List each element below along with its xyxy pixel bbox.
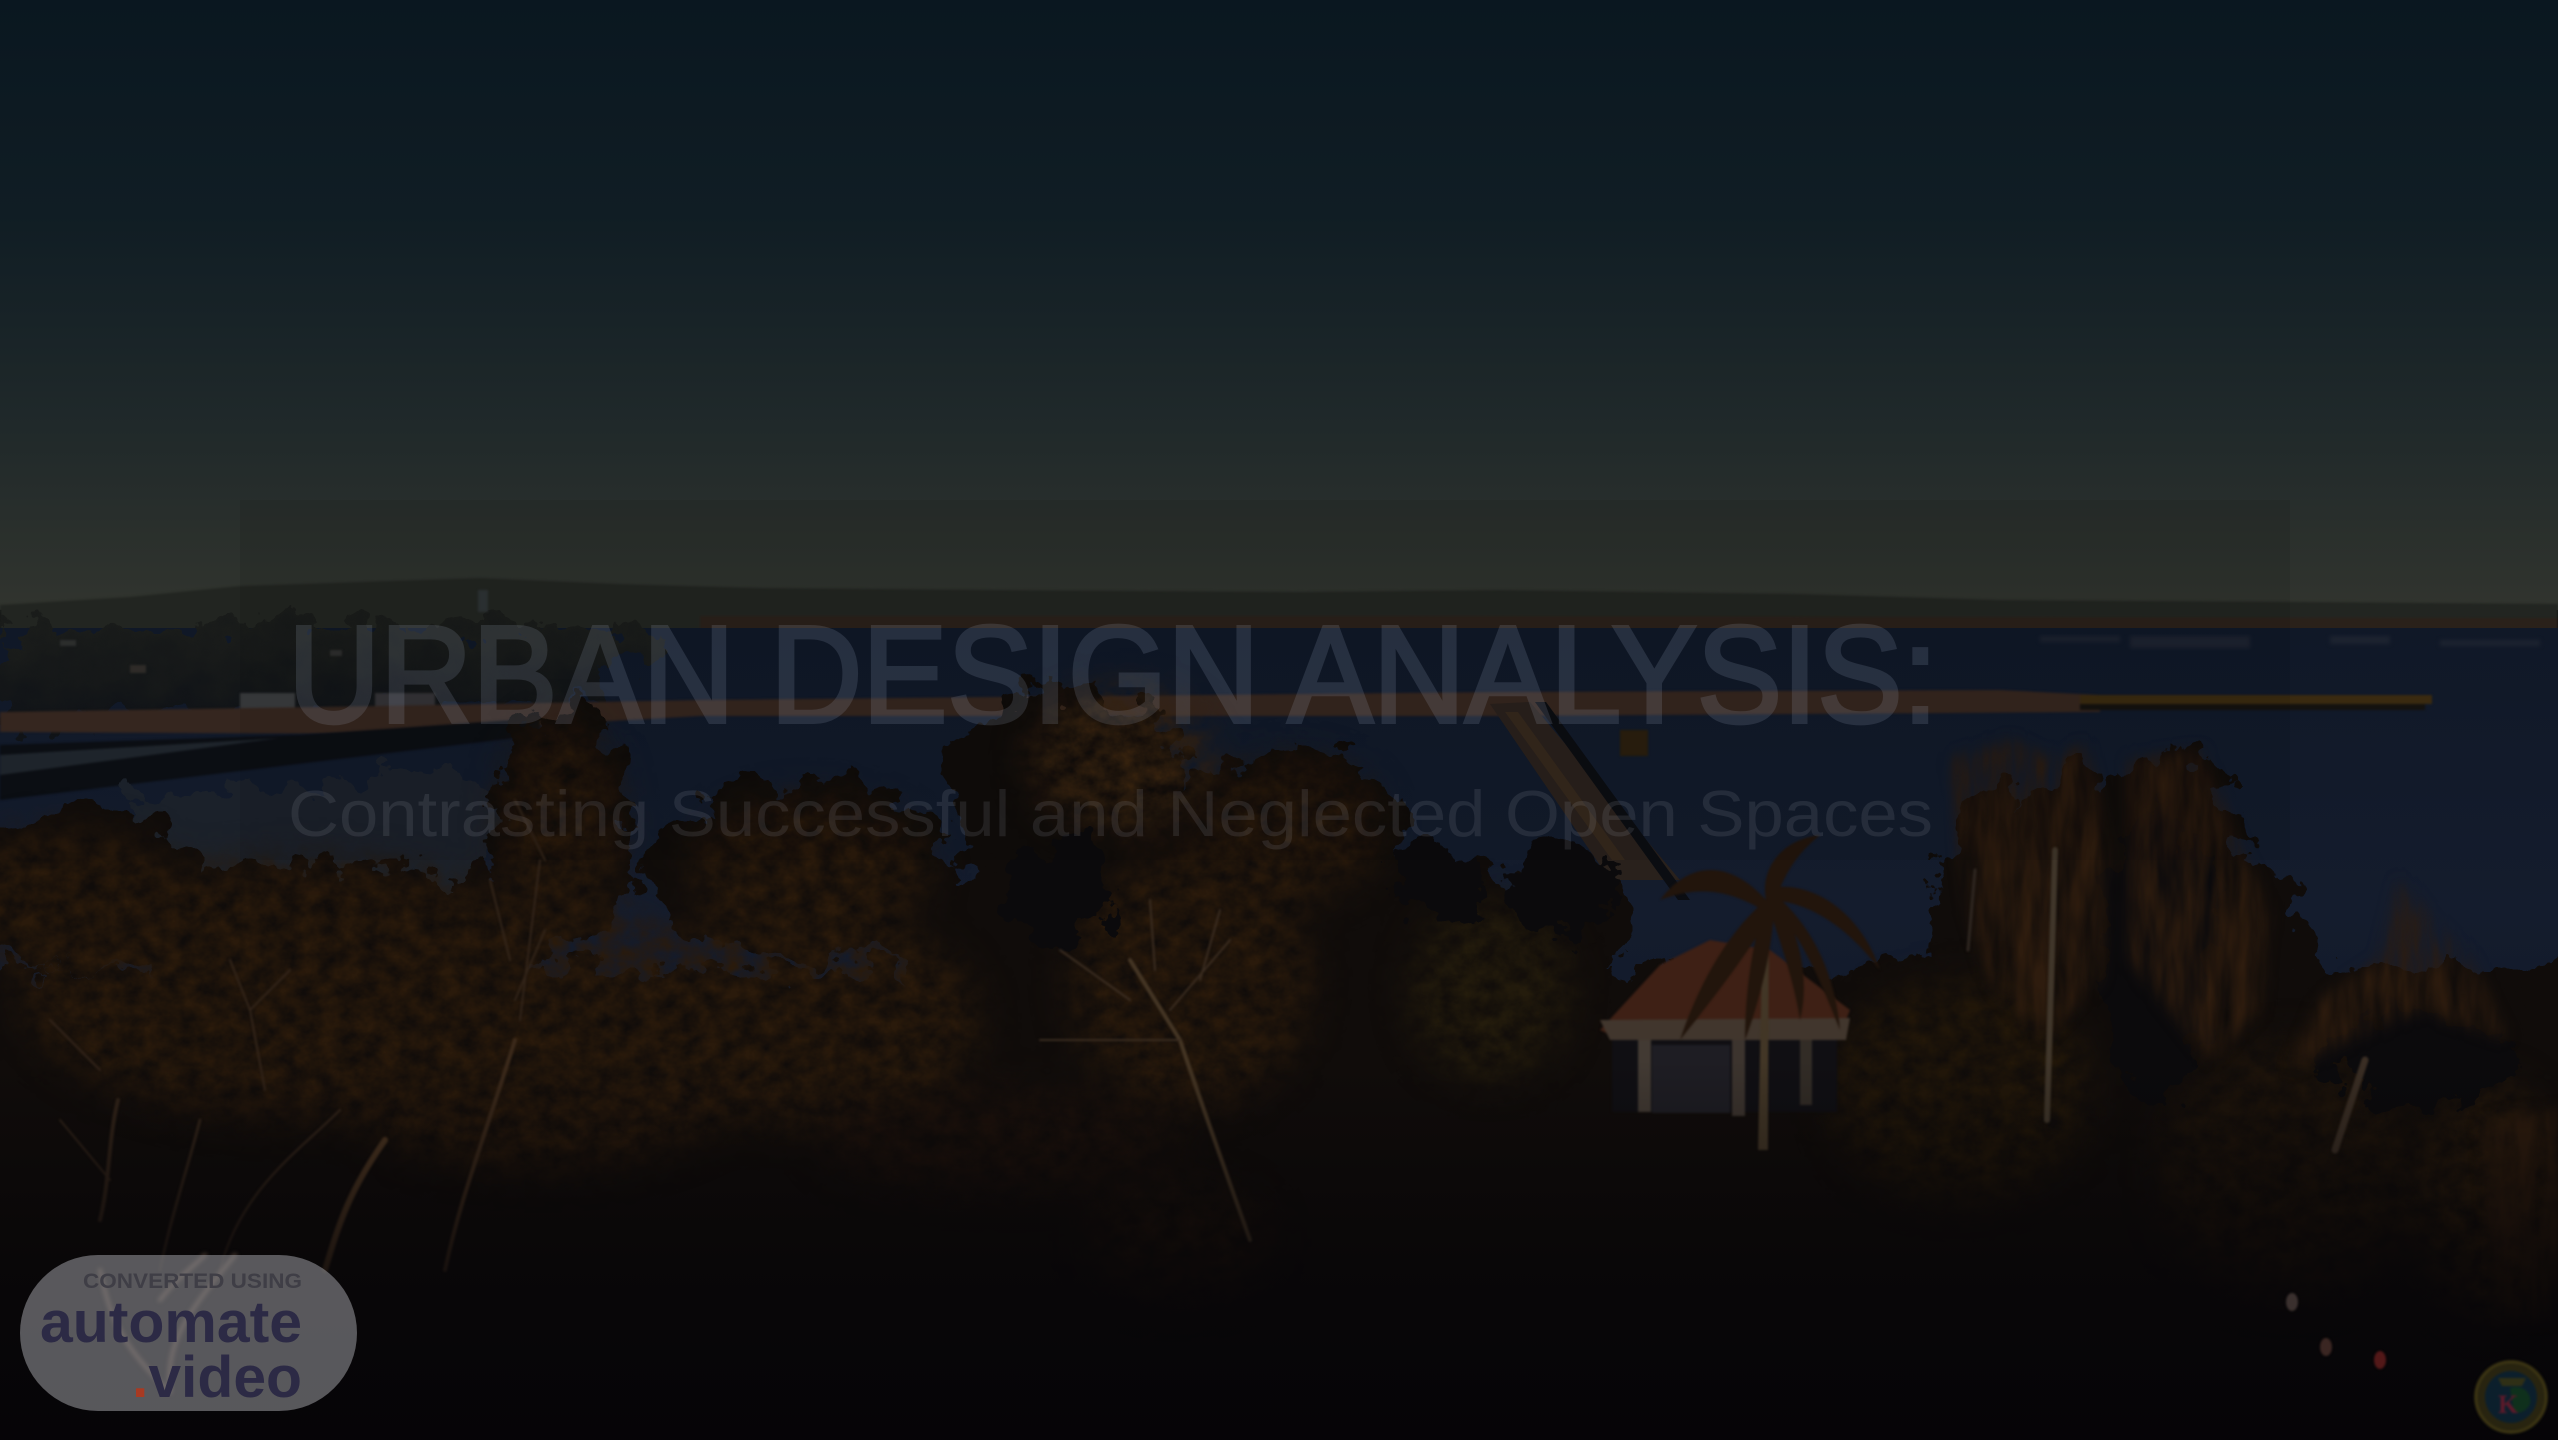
bare tree branches, left: [50, 800, 545, 1270]
distant hills and far shore: [0, 578, 2558, 632]
distant boats and reef marks: [2040, 636, 2540, 648]
darkening towards the bottom: [0, 1060, 2558, 1440]
sandbar and pier: [0, 690, 2432, 756]
palm fronds, right group: [1950, 740, 2558, 1320]
dark tree mass: [0, 690, 2558, 1440]
tree foliage lit by the sun: [0, 690, 2558, 1320]
converted-using badge: [20, 1255, 357, 1411]
sky background: [0, 0, 2558, 610]
translucent title panel: [240, 500, 2290, 860]
converted-using badge: CONVERTED USING: [83, 1270, 302, 1293]
school seal: K: [2498, 1390, 2519, 1419]
shallow foam on left: [120, 770, 1360, 930]
left shoreline town: [0, 624, 660, 725]
bare tree branches, centre: [1040, 900, 1250, 1240]
causeway on the left: [0, 718, 540, 800]
town buildings and lights: [60, 590, 488, 715]
small figures in lower right: [2286, 1293, 2386, 1369]
dark silhouettes of trees: [1005, 800, 2510, 1110]
school seal: [2474, 1360, 2548, 1434]
sea: [0, 628, 2558, 1188]
branches behind the badge: [100, 1255, 235, 1392]
title: URBAN DESIGN ANALYSIS:: [288, 598, 1938, 752]
bridge pier: [1490, 702, 1690, 900]
gazebo: [1600, 940, 1850, 1116]
palm trunks: [1968, 850, 2365, 1150]
converted-using badge: .video: [132, 1345, 302, 1410]
subtitle: Contrasting Successful and Neglected Open Spaces: [288, 777, 1933, 850]
converted-using badge: automate: [40, 1290, 302, 1355]
palm over gazebo: [1660, 835, 1880, 1150]
